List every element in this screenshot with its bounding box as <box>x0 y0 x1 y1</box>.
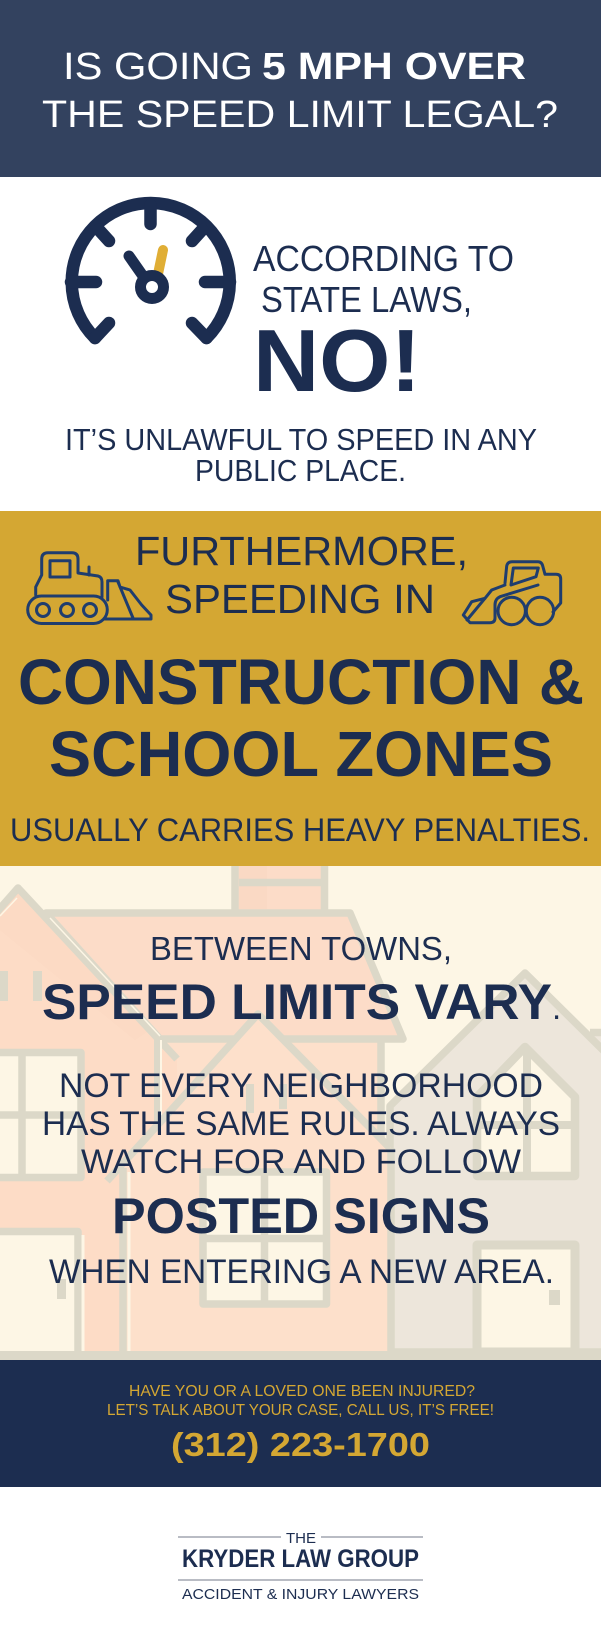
panel: header <box>0 0 601 177</box>
panel: state laws <box>65 203 537 488</box>
panel: call to action <box>0 1360 601 1487</box>
icon: bulldozer <box>28 553 151 624</box>
heading: speed limits vary: SPEED LIMITS VARY <box>42 974 552 1030</box>
logo: Kryder Law Group <box>178 1530 423 1603</box>
chimney <box>235 866 324 913</box>
logo: Kryder Law Group: THE <box>286 1530 316 1547</box>
heading: posted signs: POSTED SIGNS <box>112 1188 490 1244</box>
icon: speedometer <box>71 203 230 338</box>
text: according to state laws <box>253 238 514 320</box>
heading: construction and school zones: SCHOOL ZONES <box>49 718 553 790</box>
illustration: houses background <box>0 866 601 1360</box>
text: unlawful to speed: PUBLIC PLACE. <box>195 453 406 488</box>
main house <box>46 913 403 1352</box>
text: furthermore: SPEEDING IN <box>165 576 435 622</box>
logo: Kryder Law Group: KRYDER LAW GROUP <box>182 1545 419 1573</box>
text: unlawful to speed: IT’S UNLAWFUL TO SPEED IN ANY <box>65 422 537 457</box>
title <box>42 46 558 136</box>
text: between towns: BETWEEN TOWNS, <box>150 930 452 967</box>
text: unlawful to speed <box>65 422 537 488</box>
text: neighborhood rules <box>42 1067 560 1181</box>
front gable <box>107 1014 391 1356</box>
text: entering a new area: WHEN ENTERING A NEW AREA. <box>49 1253 554 1291</box>
text: according to state laws: STATE LAWS, <box>261 279 472 320</box>
logo: Kryder Law Group: ACCIDENT & INJURY LAWYERS <box>182 1586 419 1603</box>
panel: construction and school zones <box>0 511 601 866</box>
heading: speed limits vary: . <box>552 989 561 1026</box>
title: IS GOING <box>63 46 253 88</box>
left house <box>0 888 177 1356</box>
text: according to state laws: ACCORDING TO <box>253 238 514 279</box>
panel: speed limits vary <box>0 866 601 1360</box>
icon: skid steer loader <box>463 562 561 625</box>
text: no: NO! <box>253 311 421 410</box>
text: neighborhood rules: WATCH FOR AND FOLLOW <box>81 1143 521 1181</box>
text: furthermore <box>135 528 468 622</box>
title: 5 MPH OVER <box>262 46 526 88</box>
title: THE SPEED LIMIT LEGAL? <box>42 94 558 136</box>
text: heavy penalties: USUALLY CARRIES HEAVY PENALTIES. <box>10 812 590 848</box>
right house <box>390 973 601 1352</box>
text: call to action: HAVE YOU OR A LOVED ONE BEEN INJURED? <box>129 1383 475 1400</box>
text: call to action: LET’S TALK ABOUT YOUR CASE, CALL US, IT’S FREE! <box>107 1402 494 1419</box>
heading: construction and school zones <box>18 646 584 790</box>
text: neighborhood rules: NOT EVERY NEIGHBORHOOD <box>59 1067 543 1105</box>
text: neighborhood rules: HAS THE SAME RULES. ALWAYS <box>42 1105 560 1143</box>
heading: construction and school zones: CONSTRUCTION & <box>18 646 584 718</box>
text: call to action <box>107 1383 494 1419</box>
text: furthermore: FURTHERMORE, <box>135 528 468 574</box>
text: phone number: (312) 223-1700 <box>171 1426 430 1463</box>
